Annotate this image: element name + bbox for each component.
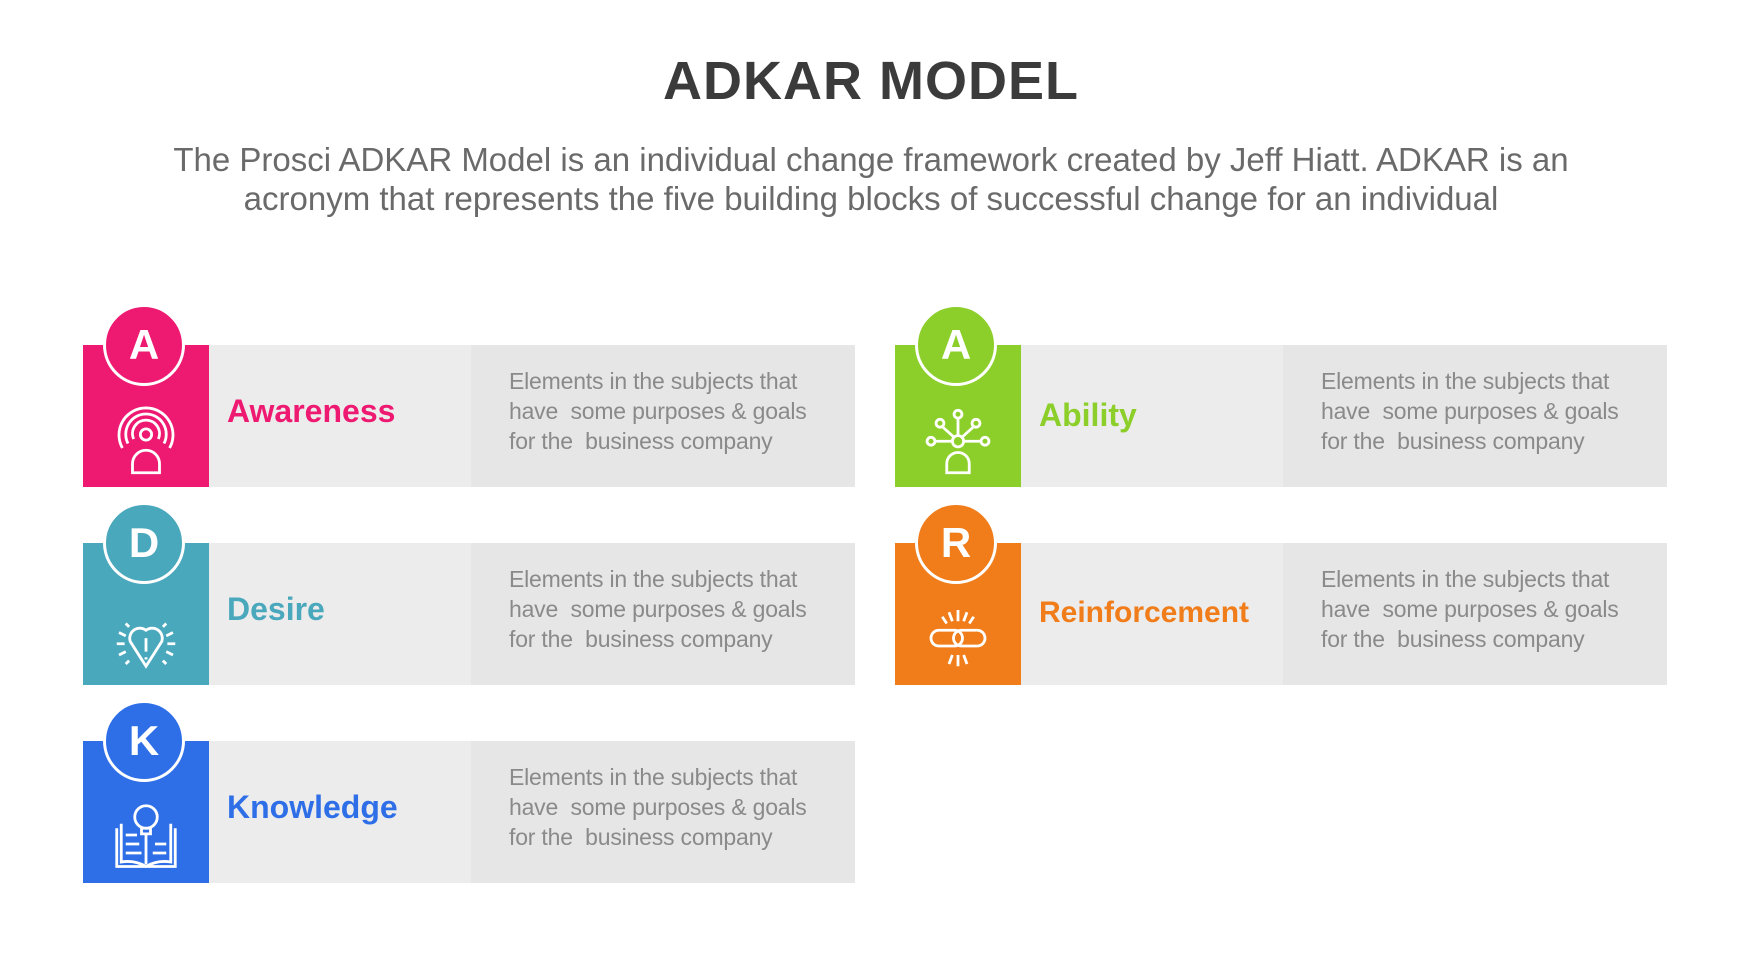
icon: network person [926,408,990,474]
badge A [103,304,185,386]
subtitle: The Prosci ADKAR Model is an individual change framework created by Jeff Hiatt. ADKAR is an [173,141,1569,178]
title: ADKAR MODEL [663,51,1079,111]
label: Awareness [227,393,395,429]
description: for the business company [1321,626,1584,652]
description: have some purposes & goals [1321,596,1619,622]
description: have some purposes & goals [1321,398,1619,424]
description: have some purposes & goals [509,398,807,424]
description: for the business company [1321,428,1584,454]
badge R [915,502,997,584]
description: Elements in the subjects that [1321,566,1609,592]
description [1321,368,1619,454]
panel: reinforcement [895,505,1667,685]
description: for the business company [509,626,772,652]
description [509,368,807,454]
label: Reinforcement [1039,596,1249,629]
description: Elements in the subjects that [509,566,797,592]
panel: knowledge [83,703,855,883]
description [1321,566,1619,652]
icon: chain [930,610,986,666]
icon: signal person [118,406,174,474]
badge A [915,304,997,386]
badge K: K [129,717,159,764]
description: have some purposes & goals [509,596,807,622]
badge K [103,700,185,782]
badge D [103,502,185,584]
badge A: A [941,321,971,368]
subtitle [173,141,1569,217]
label: Desire [227,591,325,627]
description: for the business company [509,428,772,454]
panel: desire [83,505,855,685]
icon: book bulb [115,804,177,868]
description: Elements in the subjects that [509,764,797,790]
label: Knowledge [227,789,398,825]
badge A: A [129,321,159,368]
badge R: R [941,519,971,566]
description: for the business company [509,824,772,850]
description [509,566,807,652]
description: have some purposes & goals [509,794,807,820]
subtitle: acronym that represents the five building blocks of successful change for an individual [244,180,1498,217]
panel: ability [895,307,1667,487]
description: Elements in the subjects that [509,368,797,394]
label: Ability [1039,397,1137,433]
description: Elements in the subjects that [1321,368,1609,394]
panel: awareness [83,307,855,487]
badge D: D [129,519,159,566]
icon: heart [116,622,176,669]
description [509,764,807,850]
